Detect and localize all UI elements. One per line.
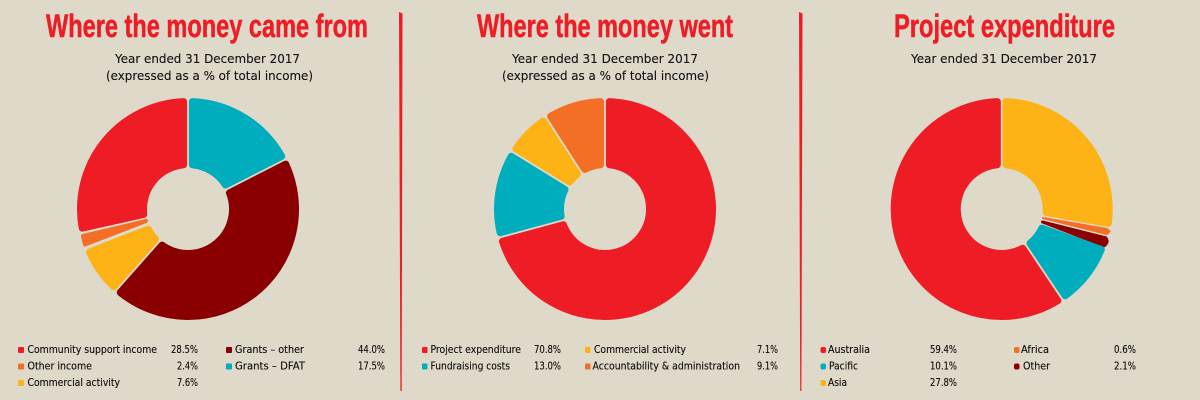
legend: 2.4% — [177, 360, 198, 372]
legend: 59.4% — [930, 344, 957, 356]
panel: project expenditure — [820, 8, 1136, 389]
legend: Other income — [28, 360, 92, 372]
subtitle — [502, 52, 709, 84]
legend: 10.1% — [930, 360, 957, 372]
legend: Community support income — [28, 344, 157, 356]
subtitle: (expressed as a % of total income) — [106, 69, 313, 84]
donut chart: expenditure — [497, 102, 713, 317]
legend: Asia — [828, 377, 847, 389]
subtitle — [106, 52, 313, 84]
legend: Australia — [828, 344, 870, 356]
heading: Where the money went — [477, 8, 733, 44]
legend: 27.8% — [930, 377, 957, 389]
heading: Project expenditure — [894, 8, 1115, 44]
legend: 13.0% — [534, 360, 561, 372]
subtitle: Year ended 31 December 2017 — [511, 52, 698, 67]
legend: Grants – other — [235, 344, 305, 356]
legend: Pacific — [829, 360, 858, 372]
panel: where the money went — [422, 8, 778, 372]
legend — [422, 344, 778, 372]
legend: Africa — [1021, 344, 1049, 356]
subtitle: (expressed as a % of total income) — [502, 69, 709, 84]
heading: Where the money came from — [46, 8, 368, 44]
legend: 9.1% — [757, 360, 778, 372]
legend: Grants – DFAT — [235, 360, 305, 372]
legend: Project expenditure — [430, 344, 521, 356]
divider: left — [399, 12, 402, 391]
legend: Other — [1023, 360, 1051, 372]
legend: 0.6% — [1114, 344, 1136, 356]
legend: 17.5% — [358, 360, 385, 372]
legend: 2.1% — [1114, 360, 1136, 372]
subtitle: Year ended 31 December 2017 — [114, 52, 300, 67]
legend: Commercial activity — [594, 344, 686, 356]
subtitle: Year ended 31 December 2017 — [910, 52, 1097, 67]
legend — [820, 344, 1136, 389]
legend — [18, 344, 385, 389]
legend: 70.8% — [534, 344, 561, 356]
legend: Fundraising costs — [430, 360, 510, 372]
donut chart: regions — [894, 102, 1110, 316]
panel: where the money came from — [18, 8, 385, 389]
legend: Accountability & administration — [592, 360, 740, 372]
legend: 28.5% — [171, 344, 198, 356]
donut chart: income sources — [81, 102, 296, 317]
legend: 44.0% — [358, 344, 385, 356]
legend: 7.6% — [177, 377, 198, 389]
divider: right — [799, 12, 802, 391]
legend: Commercial activity — [28, 377, 120, 389]
legend: 7.1% — [757, 344, 778, 356]
